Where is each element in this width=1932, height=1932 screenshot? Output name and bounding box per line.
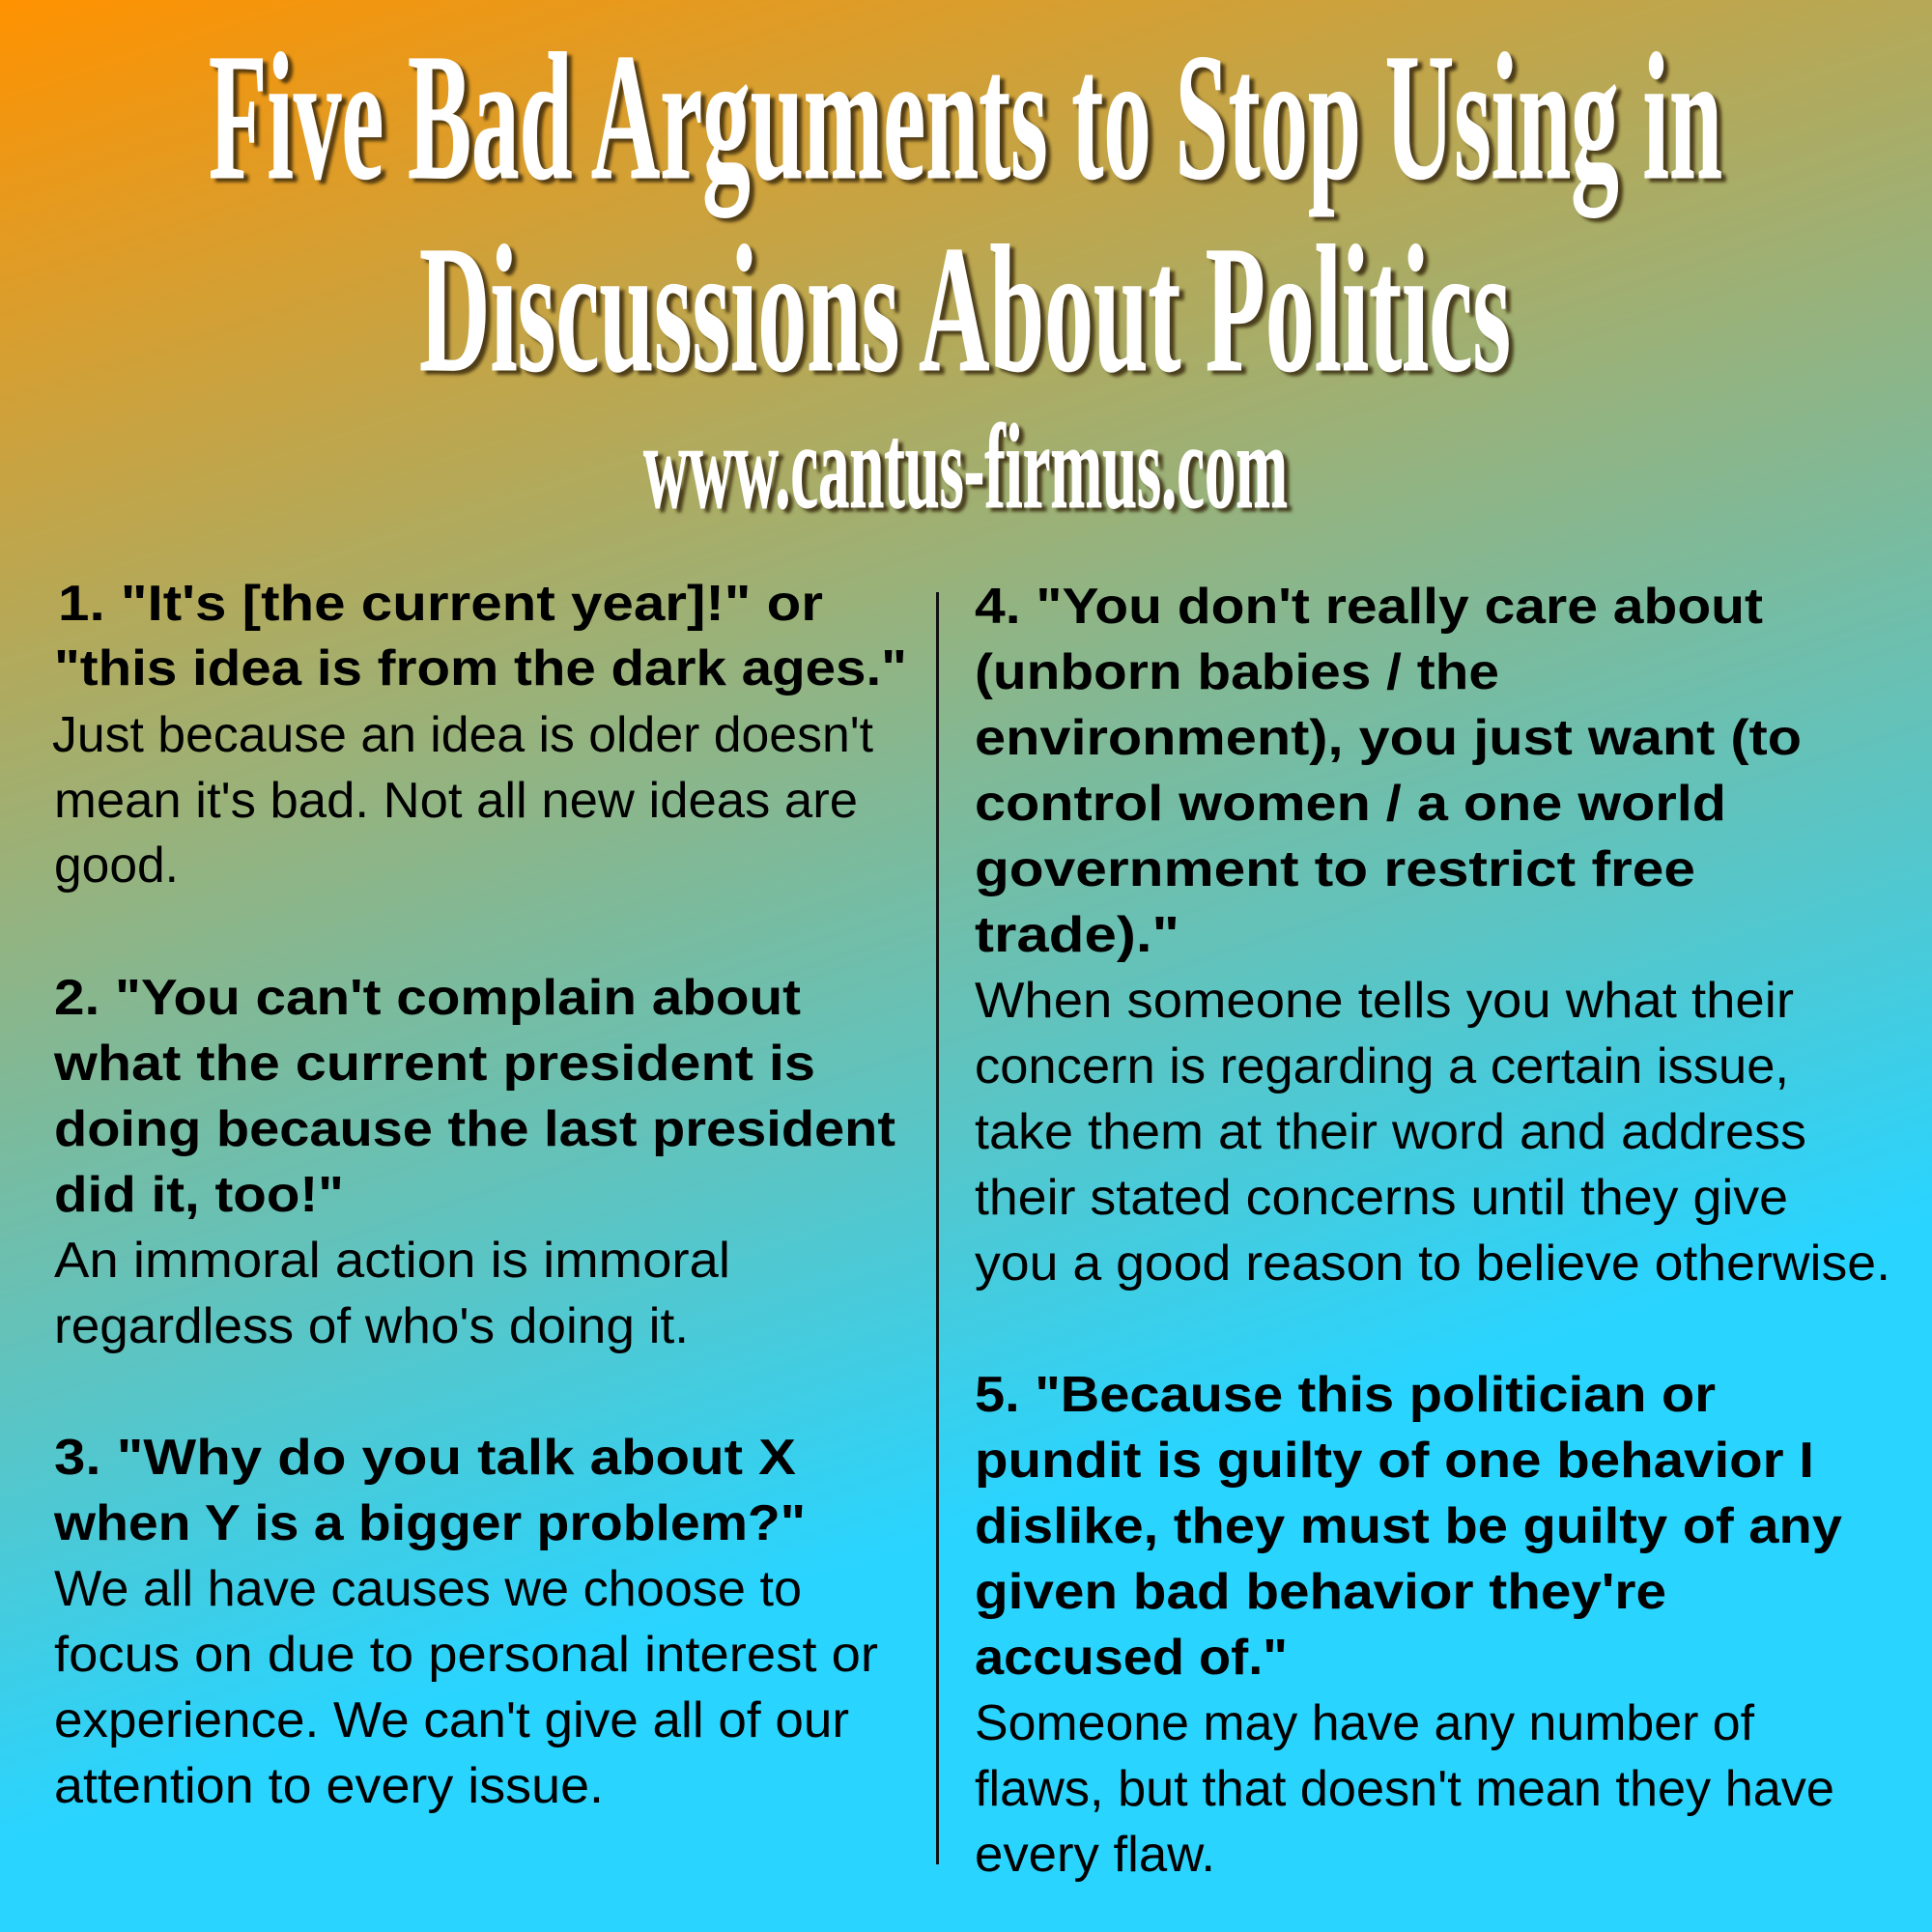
argument 2 [53, 970, 895, 1354]
panel: left column [52, 576, 907, 1814]
argument 1: good. [54, 838, 179, 894]
argument 5: every flaw. [975, 1827, 1215, 1883]
argument 4: 4. "You don't really care about [975, 579, 1763, 635]
argument 2: regardless of who's doing it. [54, 1298, 689, 1354]
argument 5: pundit is guilty of one behavior I [975, 1433, 1814, 1489]
panel: right column [975, 579, 1890, 1883]
argument 4: (unborn babies / the [975, 644, 1499, 700]
argument 4: When someone tells you what their [975, 973, 1794, 1029]
argument 4 [975, 579, 1890, 1292]
argument 4: government to restrict free [975, 841, 1695, 897]
argument 1 [52, 576, 907, 894]
argument 3: focus on due to personal interest or [54, 1627, 878, 1683]
argument 4: their stated concerns until they give [975, 1170, 1788, 1226]
title [209, 15, 1722, 410]
argument 3: 3. "Why do you talk about X [54, 1430, 796, 1486]
argument 4: control women / a one world [975, 776, 1726, 832]
argument 2: An immoral action is immoral [54, 1233, 730, 1289]
website url: www.cantus-firmus.com [643, 401, 1288, 534]
argument 4: take them at their word and address [975, 1104, 1806, 1160]
argument 5: Someone may have any number of [975, 1695, 1755, 1751]
argument 2: doing because the last president [54, 1101, 895, 1157]
argument 4: environment), you just want (to [975, 710, 1802, 766]
argument 2: what the current president is [53, 1036, 815, 1092]
argument 3: attention to every issue. [54, 1758, 604, 1814]
argument 3: experience. We can't give all of our [54, 1692, 849, 1748]
column divider [936, 592, 939, 1864]
argument 5: accused of." [975, 1630, 1288, 1686]
argument 2: did it, too!" [54, 1167, 344, 1223]
argument 1: Just because an idea is older doesn't [52, 707, 874, 763]
argument 1: mean it's bad. Not all new ideas are [54, 773, 858, 829]
argument 5: flaws, but that doesn't mean they have [975, 1761, 1834, 1817]
argument 1: "this idea is from the dark ages." [54, 640, 907, 696]
argument 4: trade)." [975, 907, 1179, 963]
argument 1: 1. "It's [the current year]!" or [58, 576, 823, 632]
argument 5: 5. "Because this politician or [975, 1367, 1716, 1423]
argument 5: dislike, they must be guilty of any [975, 1498, 1842, 1554]
argument 3 [53, 1430, 878, 1814]
argument 5 [975, 1367, 1842, 1883]
argument 3: when Y is a bigger problem?" [53, 1495, 806, 1551]
argument 3: We all have causes we choose to [54, 1561, 802, 1617]
argument 4: concern is regarding a certain issue, [975, 1038, 1789, 1094]
argument 4: you a good reason to believe otherwise. [975, 1236, 1890, 1292]
argument 5: given bad behavior they're [975, 1564, 1666, 1620]
argument 2: 2. "You can't complain about [54, 970, 801, 1026]
